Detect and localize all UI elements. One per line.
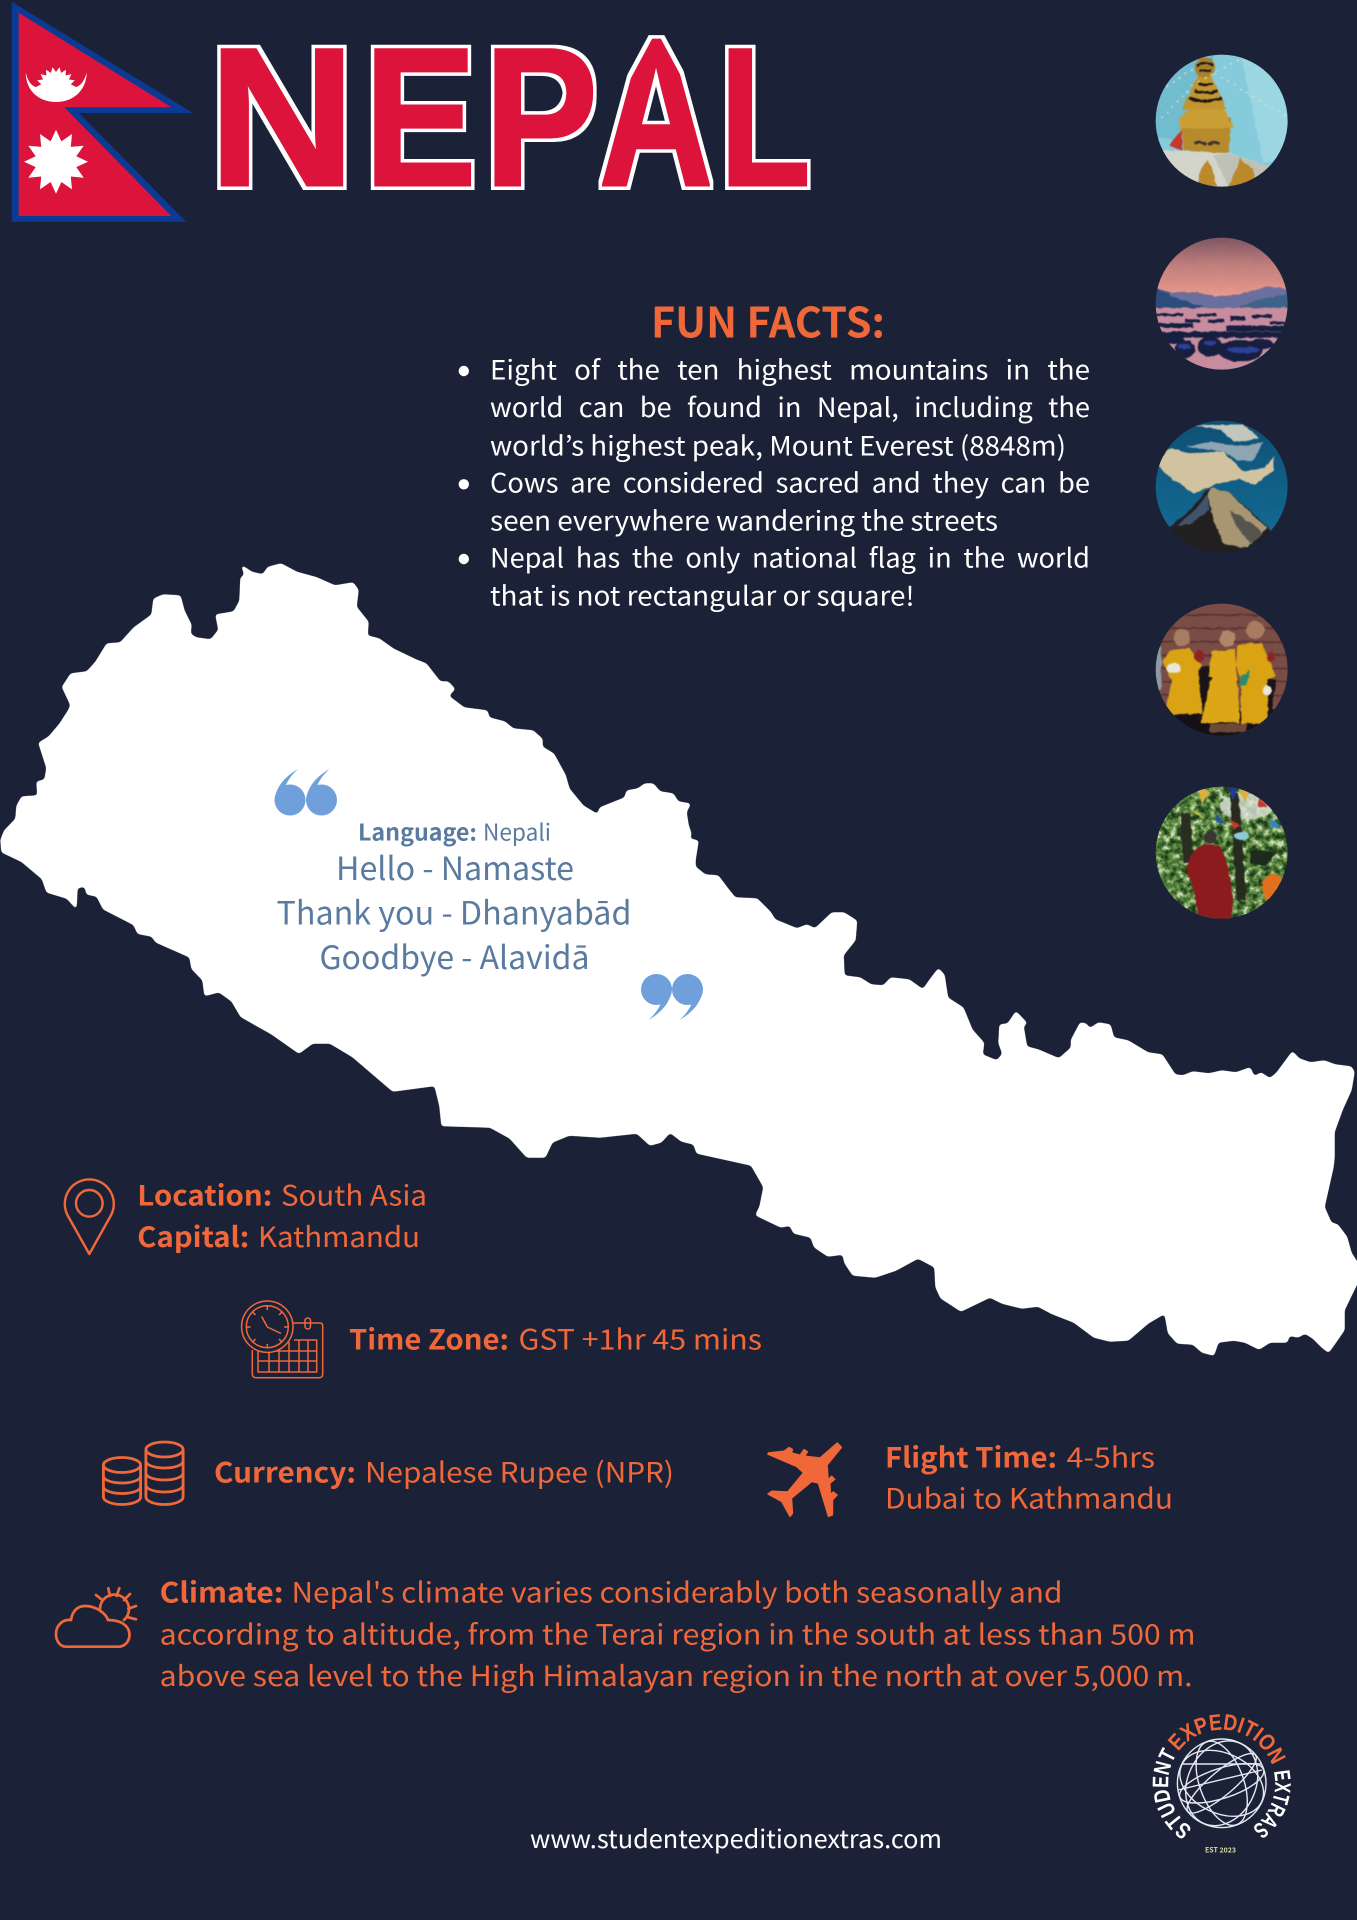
- title: E: [364, 6, 477, 227]
- text block: currency: [214, 1452, 674, 1492]
- text block: language phrases: Language:: [358, 813, 477, 847]
- logo: student expedition extras: STUDENT: [1152, 1747, 1190, 1838]
- text block: climate: above sea level to the High Himalayan region in the north at over 5,000 m.: [160, 1655, 1193, 1695]
- icon: location pin: [65, 1179, 114, 1254]
- text block: climate: according to altitude, from the Terai region in the south at less than 500 m: [160, 1614, 1196, 1654]
- icon: opening quote: [274, 769, 337, 816]
- text block: flight time: [885, 1437, 1173, 1518]
- title: [217, 35, 811, 190]
- text block: location and capital: Location:: [137, 1175, 272, 1215]
- text block: currency: Currency:: [214, 1452, 356, 1492]
- text block: time zone: GST +1hr 45 mins: [518, 1318, 762, 1358]
- title: P: [484, 8, 598, 228]
- text block: fun facts list: Eight of the ten highest mountains in the: [490, 348, 1090, 387]
- text block: language phrases: [276, 813, 632, 979]
- text block: climate: [160, 1572, 1196, 1695]
- text block: fun facts list: world’s highest peak, Mount Everest (8848m): [490, 424, 1066, 464]
- map of Nepal: [1, 564, 1357, 1355]
- text block: location and capital: [137, 1175, 427, 1256]
- text block: fun facts list: seen everywhere wandering the streets: [490, 500, 998, 538]
- website url: www.studentexpeditionextras.com: [530, 1820, 942, 1856]
- text block: language phrases: Nepali: [483, 813, 551, 847]
- text block: fun facts list: that is not rectangular or square!: [490, 574, 914, 614]
- photo: monk in the forest: [1156, 786, 1288, 919]
- icon: airplane: [768, 1443, 842, 1517]
- logo: student expedition extras: EST 2023: [1205, 1846, 1236, 1856]
- text block: currency: Nepalese Rupee (NPR): [365, 1452, 674, 1492]
- text block: time zone: Time Zone:: [349, 1318, 509, 1358]
- text block: language phrases: Goodbye - Alavidā: [320, 933, 590, 979]
- text block: location and capital: South Asia: [281, 1175, 427, 1215]
- icon: closing quote: [641, 974, 703, 1020]
- text block: location and capital: Kathmandu: [258, 1216, 420, 1256]
- text block: flight time: Flight Time:: [885, 1437, 1057, 1477]
- title: L: [720, 7, 811, 228]
- text block: language phrases: Hello - Namaste: [336, 844, 574, 890]
- photo: golden stupa: [1156, 54, 1288, 187]
- icon: Nepal flag: [12, 2, 193, 222]
- icon: coin stacks: [103, 1442, 183, 1504]
- photo: mountain peak: [1156, 420, 1288, 552]
- icon: cloud and sun: [56, 1588, 136, 1647]
- text block: fun facts list: Cows are considered sacred and they can be: [490, 462, 1090, 500]
- icon: clock and calendar: [242, 1301, 323, 1378]
- text block: fun facts list: Nepal has the only national flag in the world: [490, 536, 1090, 576]
- logo: student expedition extras: EXTRAS: [1254, 1770, 1291, 1838]
- logo: student expedition extras: [1152, 1714, 1291, 1856]
- photo: young monks: [1156, 604, 1288, 736]
- text block: climate: Climate:: [160, 1572, 284, 1612]
- logo: student expedition extras: EXPEDITION: [1168, 1714, 1286, 1764]
- title: N: [208, 7, 356, 228]
- title: A: [599, 0, 713, 231]
- text block: flight time: 4-5hrs: [1066, 1437, 1155, 1477]
- heading: fun facts: FUN FACTS:: [651, 290, 885, 350]
- photo: lake at sunset: [1156, 238, 1288, 370]
- text block: flight time: Dubai to Kathmandu: [885, 1478, 1173, 1518]
- text block: language phrases: Thank you - Dhanyabād: [276, 888, 632, 934]
- text block: climate: Nepal's climate varies considerably both seasonally and: [292, 1572, 1062, 1612]
- text block: fun facts list: [459, 348, 1090, 614]
- text block: time zone: [349, 1318, 762, 1358]
- text block: location and capital: Capital:: [137, 1216, 249, 1256]
- text block: fun facts list: world can be found in Nepal, including the: [490, 386, 1090, 425]
